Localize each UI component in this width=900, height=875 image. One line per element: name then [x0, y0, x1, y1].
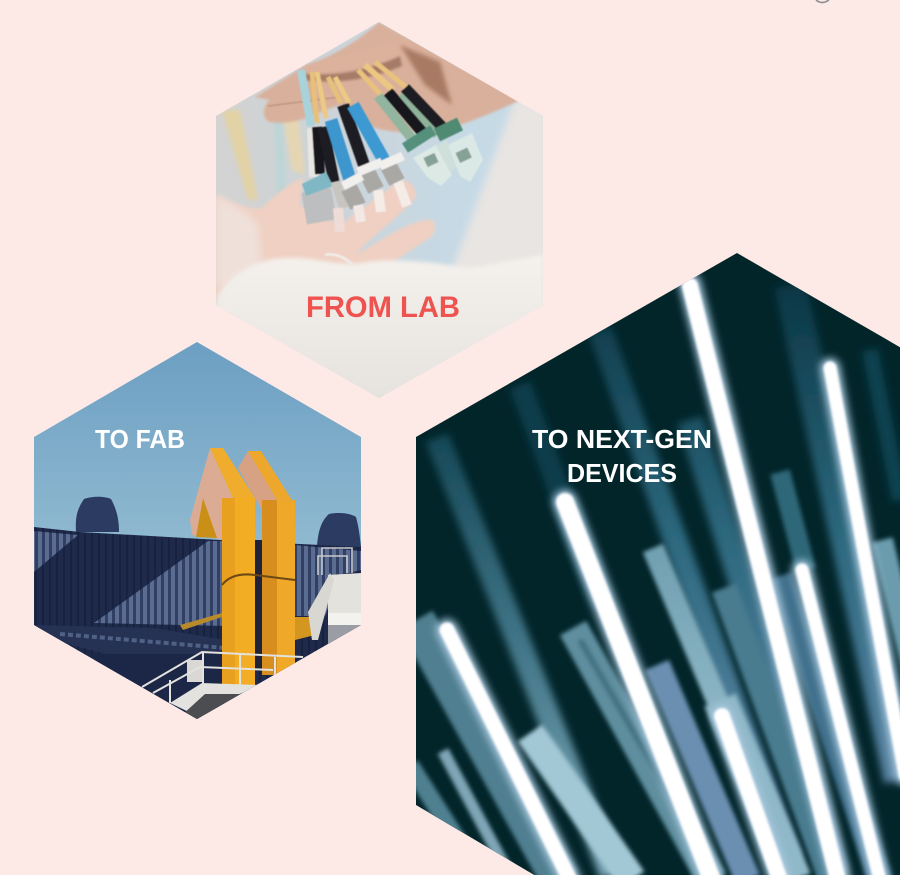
photo: fab building with yellow ducts: [34, 342, 361, 719]
connector cables right group: [358, 62, 483, 186]
label: from lab: FROM LAB: [306, 291, 460, 324]
panel: to fab hexagon: [34, 342, 361, 719]
label: to next-gen devices: DEVICES: [567, 458, 677, 488]
white service block and stairs: [308, 548, 361, 650]
panel: to next-gen devices hexagon: [410, 253, 900, 875]
label: to next-gen devices: [532, 430, 710, 482]
yellow duct pipes: [180, 448, 315, 685]
label: to fab: TO FAB: [95, 424, 185, 454]
photo: hands holding fibre optic connectors: [216, 22, 548, 400]
photo: glowing optical fibres: [410, 253, 900, 875]
clipped glyph at top edge: [816, 0, 829, 2]
label: to next-gen devices: TO NEXT-GEN: [532, 424, 712, 454]
panel: from lab hexagon: [216, 22, 548, 400]
connector cables left group: [301, 70, 407, 232]
mid-tone strands: [410, 472, 900, 875]
bright white strands: [447, 284, 900, 875]
white platform railing: [142, 652, 303, 703]
dim background strands: [437, 285, 900, 875]
